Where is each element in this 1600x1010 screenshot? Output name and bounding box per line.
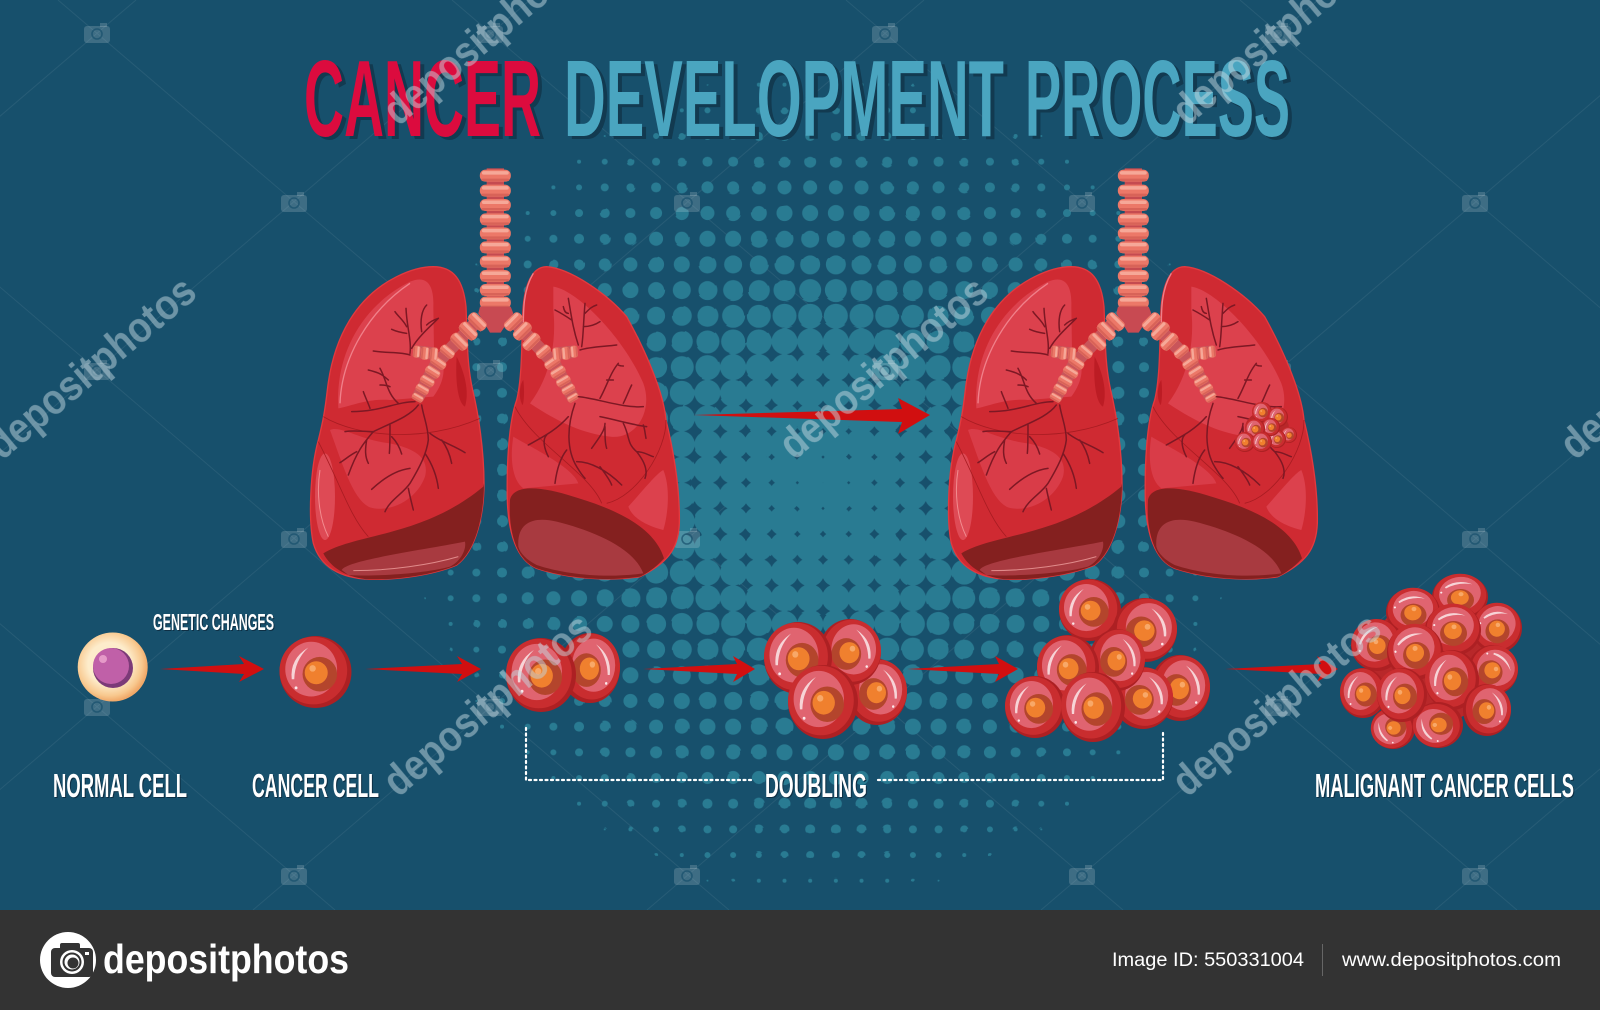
footer logo icon	[40, 932, 96, 988]
footer url: www.depositphotos.com	[1341, 949, 1561, 971]
doubling bracket	[526, 728, 1163, 780]
arrow: doubling to malignant cells	[1225, 656, 1338, 682]
healthy lungs	[311, 168, 679, 579]
title: CANCER	[304, 38, 541, 160]
arrow: lung progression	[693, 398, 930, 434]
text: PROCESS	[1025, 38, 1290, 160]
arrow: four to eight cells	[907, 656, 1018, 682]
arrow: normal to cancer cell	[160, 656, 264, 682]
cell labels	[53, 767, 1574, 804]
diagonal depositphotos watermarks: depositphotos	[374, 604, 601, 806]
tumour cluster	[1235, 402, 1297, 452]
diagonal depositphotos watermarks: depositphotos	[1163, 604, 1390, 806]
cancer cell	[280, 636, 352, 708]
four-cell cluster	[764, 619, 907, 739]
footer divider	[1322, 944, 1323, 976]
footer bar	[0, 910, 1600, 1010]
cell labels: CANCER CELL	[252, 767, 379, 804]
image id: Image ID: 550331004	[1112, 949, 1304, 971]
diagonal depositphotos watermarks	[0, 0, 1600, 806]
watermark camera icons	[84, 23, 1488, 885]
title	[304, 38, 1290, 160]
arrow: cancer cell to two cells	[365, 656, 481, 682]
eight-cell cluster	[1005, 579, 1210, 742]
two-cell cluster	[506, 633, 620, 712]
normal cell	[78, 632, 148, 702]
cell labels: NORMAL CELL	[53, 767, 187, 804]
title: DEVELOPMENT	[564, 38, 1004, 160]
cell labels: DOUBLING	[765, 767, 867, 804]
footer logo wordmark: depositphotos	[103, 936, 349, 982]
label: genetic changes: GENETIC CHANGES	[153, 609, 274, 635]
malignant cancer cells cluster	[1340, 565, 1532, 758]
halftone dot background	[408, 68, 1238, 898]
arrow: two to four cells	[643, 656, 755, 682]
lungs with tumour	[949, 168, 1317, 579]
diagonal depositphotos watermarks: depositphotos	[770, 267, 997, 469]
